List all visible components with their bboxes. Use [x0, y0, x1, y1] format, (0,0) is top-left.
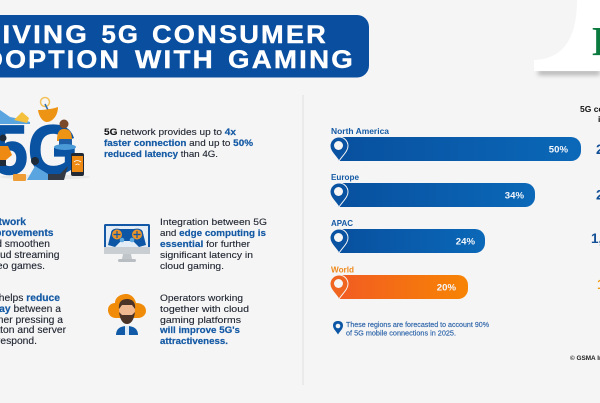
bar: APAC: APAC	[331, 218, 353, 228]
text: edge computing: and edge computing is	[160, 228, 266, 239]
footnote: These regions are forecasted to account 90%	[346, 320, 489, 329]
text: operators: Operators working	[160, 293, 243, 304]
bar: North America: North America	[331, 126, 389, 136]
title banner: CONSUMER	[152, 21, 328, 49]
title banner: 5G	[102, 21, 140, 49]
bar: Europe: 34%	[505, 190, 524, 202]
text: edge computing: significant latency in	[160, 250, 253, 261]
text: edge computing: essential for further	[160, 239, 251, 250]
text: operators	[159, 293, 249, 347]
title banner	[0, 15, 369, 78]
logo panel	[534, 0, 600, 75]
title banner: GAMING	[228, 46, 355, 74]
footnote: of 5G mobile connections in 2025.	[346, 328, 456, 338]
panel divider	[302, 95, 304, 385]
text: operators: attractiveness.	[160, 336, 228, 347]
bar: World: World	[331, 264, 354, 274]
text: operators: gaming platforms	[160, 315, 241, 326]
column heading: 5G connections	[580, 104, 600, 124]
bar: North America	[330, 126, 581, 161]
connection values	[591, 142, 600, 292]
bar: APAC	[330, 218, 485, 253]
text: network improvements	[0, 217, 60, 272]
bar: APAC: 24%	[456, 236, 475, 248]
text: edge computing	[160, 217, 267, 272]
bar: World	[330, 264, 468, 299]
bar: World: 20%	[437, 282, 456, 294]
text: 5G network speed: faster connection and up to 50%	[104, 138, 253, 149]
text: reduce delay	[0, 293, 67, 347]
icon: game controller monitor	[104, 224, 150, 262]
text: 5G network speed: 5G network provides up to 4x	[104, 127, 237, 138]
bar: North America: 50%	[549, 144, 568, 156]
bar: Europe	[330, 172, 535, 207]
text: operators: will improve 5G's	[159, 325, 240, 336]
footnote	[333, 320, 489, 338]
text: 5G network speed: reduced latency than 4G.	[104, 149, 218, 160]
icon: person with cloud	[108, 294, 146, 335]
text: operators: together with cloud	[160, 304, 249, 315]
bar: Europe: Europe	[331, 172, 359, 182]
text: edge computing: cloud gaming.	[160, 261, 224, 272]
text: edge computing: Integration between 5G	[160, 217, 267, 228]
title banner: WITH	[135, 46, 215, 74]
text: 5G network speed	[104, 127, 253, 160]
